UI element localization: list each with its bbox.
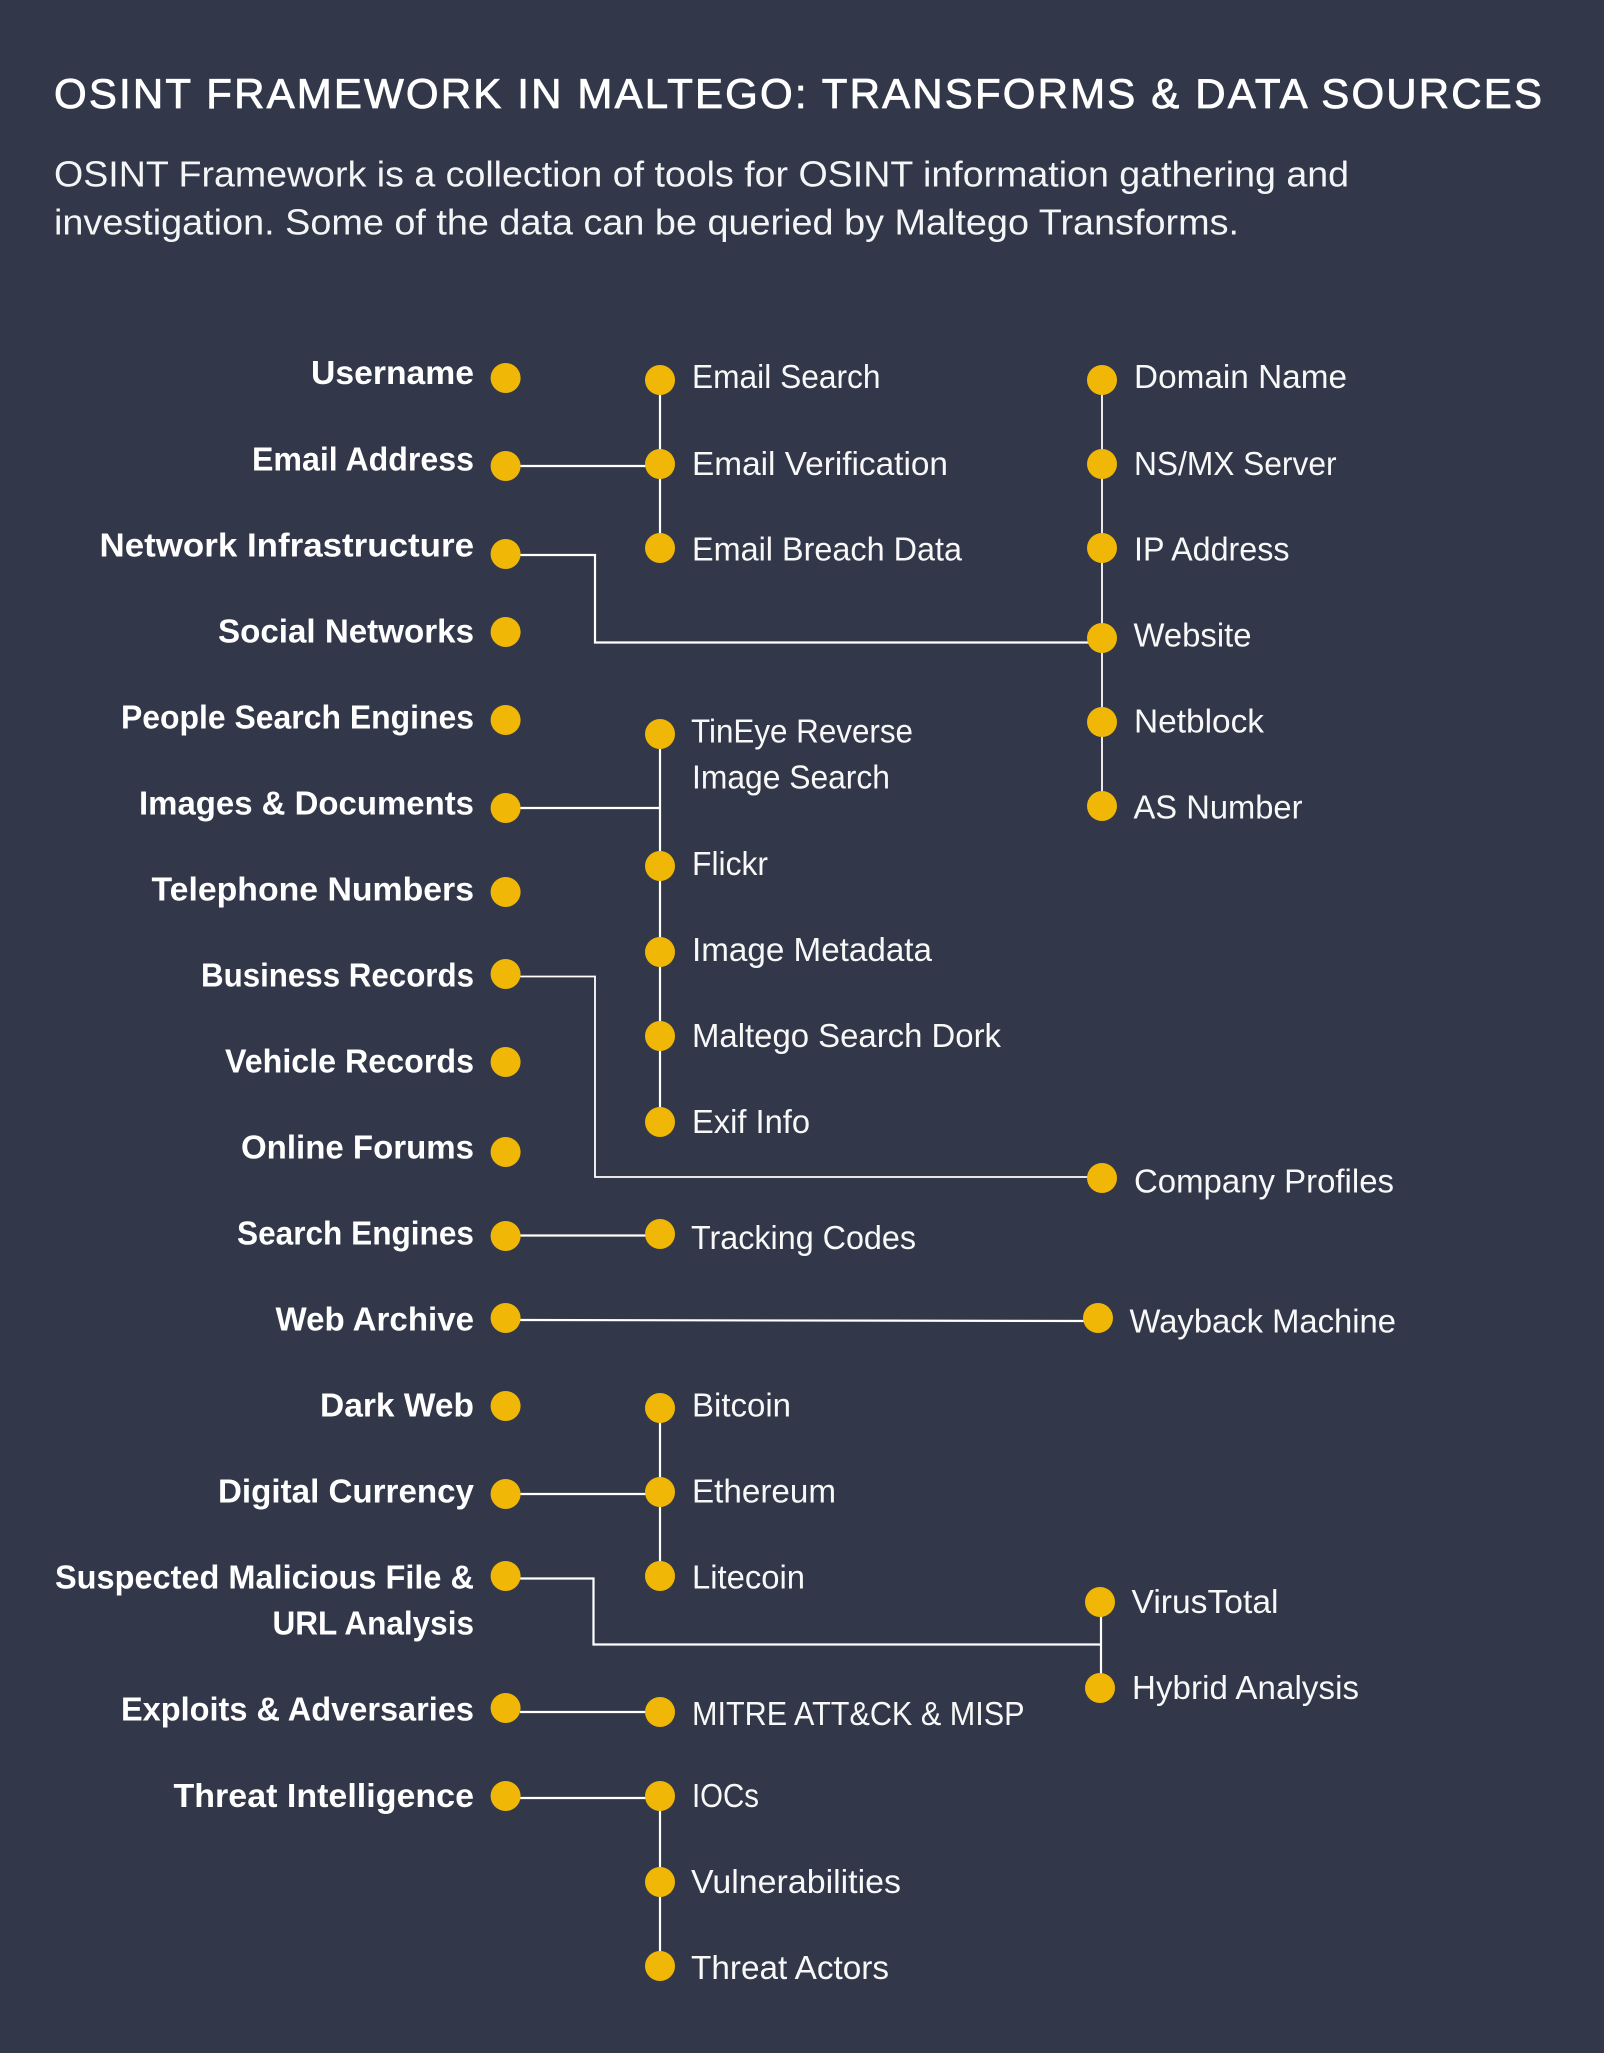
category: Username: Username (311, 355, 474, 392)
item: Litecoin: Litecoin (692, 1558, 805, 1596)
category: Threat Intelligence: Threat Intelligence (174, 1778, 474, 1815)
item: TinEye Reverse Image Search (645, 712, 913, 796)
item: Ethereum: Ethereum (692, 1472, 836, 1510)
connector: threat intelligence to IOCs (520, 1797, 660, 1799)
connector: network infrastructure to website (520, 555, 1102, 642)
item: IP Address: IP Address (1134, 530, 1290, 568)
item: Threat Actors: Threat Actors (691, 1949, 889, 1986)
item: Bitcoin (645, 1386, 791, 1424)
item: Image Metadata: Image Metadata (692, 931, 933, 968)
connector: analysis group spine (1100, 1602, 1102, 1688)
connector: email group spine (659, 380, 661, 548)
category: Search Engines: Search Engines (237, 1216, 474, 1252)
item: Hybrid Analysis: Hybrid Analysis (1132, 1669, 1359, 1706)
category: Exploits & Adversaries: Exploits & Adversaries (121, 1692, 474, 1728)
connector: currency group spine (659, 1408, 661, 1576)
item: Vulnerabilities: Vulnerabilities (691, 1863, 901, 1900)
category: Vehicle Records: Vehicle Records (225, 1044, 474, 1080)
item: Domain Name: Domain Name (1134, 358, 1347, 395)
connector: image group spine (659, 734, 661, 1122)
category: Social Networks: Social Networks (218, 614, 474, 650)
connector: email address to email group (520, 465, 660, 467)
item: Company Profiles: Company Profiles (1134, 1162, 1394, 1200)
item: Tracking Codes: Tracking Codes (691, 1219, 916, 1256)
item: TinEye Reverse Image Search: Image Search (692, 758, 890, 796)
connector: threat group spine (659, 1796, 661, 1966)
item: Netblock: Netblock (1134, 702, 1265, 740)
subtitle text block (54, 154, 1349, 242)
connector: business records to company profiles (520, 976, 1102, 1177)
item: Maltego Search Dork: Maltego Search Dork (692, 1017, 1001, 1054)
connector: search engines to tracking codes (520, 1234, 660, 1237)
category: Email Address: Email Address (252, 442, 474, 478)
category: Telephone Numbers: Telephone Numbers (152, 872, 474, 908)
item: TinEye Reverse Image Search: TinEye Reverse (691, 712, 913, 750)
item: Exif Info: Exif Info (692, 1103, 810, 1140)
item: Email Search: Email Search (692, 358, 880, 395)
panel: middle column of data sources (645, 358, 1024, 1986)
category: People Search Engines: People Search Engines (121, 700, 474, 736)
category: Web Archive: Web Archive (276, 1302, 474, 1338)
connector: web archive to wayback machine (520, 1320, 1098, 1321)
category: Dark Web: Dark Web (320, 1388, 474, 1424)
connector: malicious file analysis to analysis group (520, 1578, 1100, 1644)
item: NS/MX Server: NS/MX Server (1134, 445, 1337, 482)
title: OSINT FRAMEWORK IN MALTEGO: TRANSFORMS & DATA SOURCES (54, 70, 1542, 117)
category: Business Records: Business Records (201, 958, 474, 994)
connector: digital currency to currency group (520, 1493, 660, 1495)
item: Flickr (645, 845, 768, 882)
item: Flickr: Flickr (692, 845, 768, 882)
item: VirusTotal: VirusTotal (1132, 1583, 1278, 1620)
category: Suspected Malicious File & URL Analysis (55, 1560, 521, 1642)
category: Suspected Malicious File & URL Analysis: Suspected Malicious File & (55, 1560, 474, 1596)
item: IOCs: IOCs (692, 1777, 759, 1814)
category: Digital Currency: Digital Currency (218, 1474, 474, 1510)
item: Website: Website (1134, 616, 1252, 654)
panel: right column of data sources (1083, 358, 1396, 1706)
connector: images and documents to image group (520, 807, 660, 809)
item: IOCs (645, 1777, 759, 1814)
category: Suspected Malicious File & URL Analysis: URL Analysis (272, 1606, 474, 1642)
category: Network Infrastructure: Network Infrastructure (100, 528, 474, 564)
connector: network group spine (1101, 380, 1103, 806)
category: Images & Documents: Images & Documents (139, 786, 474, 822)
category: Online Forums: Online Forums (241, 1130, 474, 1166)
item: AS Number: AS Number (1134, 788, 1303, 826)
item: Wayback Machine: Wayback Machine (1130, 1302, 1396, 1340)
item: Bitcoin: Bitcoin (692, 1386, 791, 1424)
panel: category column (55, 355, 521, 1815)
subtitle text block: investigation. Some of the data can be queried by Maltego Transforms. (54, 202, 1239, 242)
subtitle text block: OSINT Framework is a collection of tools for OSINT information gathering and (54, 154, 1349, 194)
connector lines (520, 380, 1102, 1966)
item: Email Breach Data: Email Breach Data (692, 530, 963, 568)
connector: exploits to MITRE (520, 1711, 660, 1713)
item: Email Verification: Email Verification (692, 445, 948, 482)
item: MITRE ATT&CK & MISP: MITRE ATT&CK & MISP (692, 1695, 1024, 1732)
